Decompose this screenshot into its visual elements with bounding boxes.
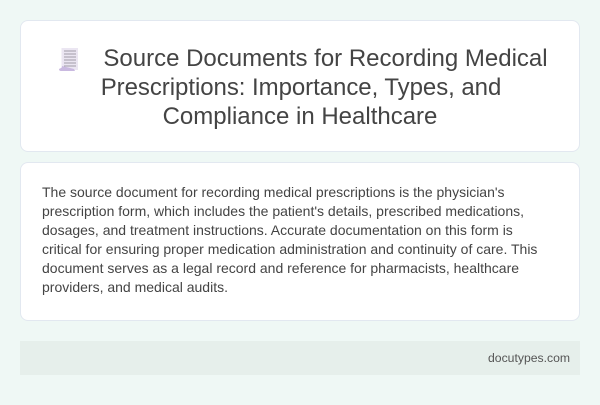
description text: prescription form, which includes the patient's details, prescribed medications,	[42, 203, 524, 219]
icon: document scroll	[59, 48, 78, 71]
description text	[42, 184, 537, 295]
title: Prescriptions: Importance, Types, and	[101, 74, 501, 101]
description text: The source document for recording medical prescriptions is the physician's	[42, 184, 505, 200]
description text: critical for ensuring proper medication administration and continuity of care. This	[42, 241, 537, 257]
description text: dosages, and treatment instructions. Accurate documentation on this form is	[42, 222, 513, 238]
title: Source Documents for Recording Medical	[103, 45, 548, 72]
panel: title card	[20, 20, 580, 152]
description text: providers, and medical audits.	[42, 279, 228, 295]
footer source text: docutypes.com	[488, 351, 570, 365]
title: Compliance in Healthcare	[163, 103, 437, 130]
title	[101, 45, 548, 130]
panel: description card	[20, 162, 580, 321]
description text: document serves as a legal record and reference for pharmacists, healthcare	[42, 260, 519, 276]
footer bar	[20, 341, 580, 375]
